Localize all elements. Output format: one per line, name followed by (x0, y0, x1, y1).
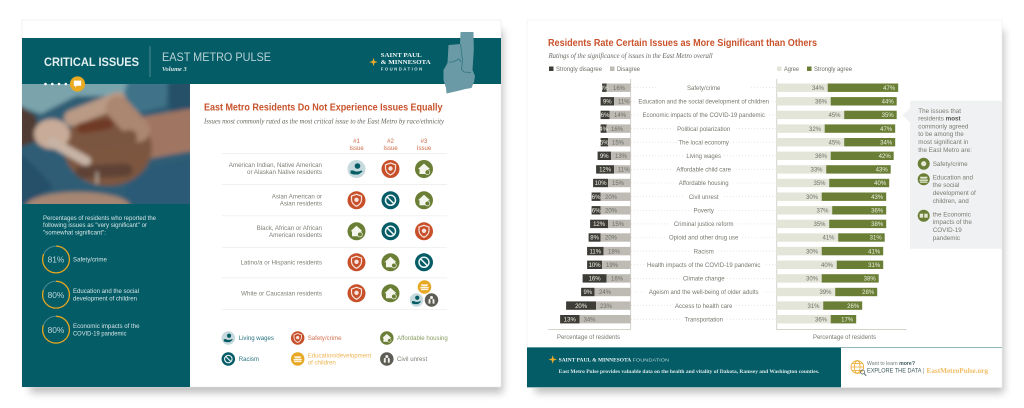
column headers: #1 (353, 139, 360, 145)
row: transportation: 34% (584, 317, 596, 323)
legend: disagree: Strongly disagree (556, 67, 603, 73)
shadow: left slide (30, 30, 503, 393)
callout: most significant issues: development of (933, 190, 976, 197)
row: health impacts: 31% (868, 263, 881, 269)
callout: most significant issues: pandemic (933, 235, 960, 242)
row: access to health care: 20% (575, 304, 588, 310)
row: criminal justice reform: 12% (593, 222, 606, 228)
row: political polarization: 32% (809, 127, 822, 133)
row: opioid: 31% (870, 236, 882, 242)
row: criminal justice reform: 38% (871, 222, 884, 228)
callout: most significant issues: to be among the (918, 131, 964, 138)
footer: explore the data: | (923, 369, 925, 375)
row: access to health care: 26% (847, 304, 860, 310)
row: White: White or Caucasian residents (241, 291, 322, 298)
row: affordable child care: Affordable child care (676, 168, 732, 174)
row: poverty: 37% (816, 209, 829, 215)
row: local economy (600, 137, 895, 147)
row: racism: Racism (694, 249, 714, 255)
row: civil unrest: 30% (806, 195, 819, 201)
row: health impacts: 19% (606, 263, 619, 269)
row: affordable housing: Affordable housing (679, 181, 729, 187)
row: racism: 30% (806, 249, 819, 255)
subtitle: ratings: Ratings of the significance of issues in the East Metro overall (548, 52, 713, 60)
panel: right slide (527, 20, 1002, 388)
diverging bar chart (548, 79, 907, 330)
photo: holding hands (22, 84, 190, 204)
footer: explore the data (851, 361, 989, 376)
row: Black: American residents (269, 232, 322, 239)
stat: 80 percent economic impacts: COVID-19 pandemic (73, 330, 126, 337)
row: affordable housing (593, 178, 889, 188)
row: living wages: Living wages (686, 154, 721, 160)
row: transportation: Transportation (684, 317, 723, 323)
stat: 81 percent safety: Safety/crime (73, 257, 107, 264)
row: local economy: 5% (600, 140, 609, 146)
row: political polarization: 47% (880, 127, 893, 133)
row: opioid: 8% (590, 236, 600, 242)
stat: 81 percent safety: 81% (48, 255, 65, 265)
row: climate change (583, 273, 879, 283)
shadow: right slide (535, 30, 1004, 393)
row: White (241, 280, 438, 307)
row: local economy: 15% (612, 140, 625, 146)
row: access to health care: 31% (807, 304, 820, 310)
row: health impacts: 10% (589, 263, 601, 269)
row: education: 44% (882, 100, 894, 106)
callout: most significant issues: commonly agreed (918, 123, 969, 130)
axis label: right: Percentage of residents (813, 335, 876, 341)
row: climate change: 38% (864, 277, 876, 283)
footer: foundation (527, 347, 1002, 387)
row: poverty: Poverty (694, 209, 714, 215)
row: local economy: 34% (880, 140, 893, 146)
row: Latino (240, 253, 433, 271)
axis label: left: Percentage of residents (557, 335, 620, 341)
row: health impacts (587, 260, 883, 270)
heading: east metro pulse: EAST METRO PULSE (162, 52, 271, 64)
stat: 80 percent economic impacts: 80% (48, 325, 65, 335)
row: safety/crime: 34% (812, 86, 825, 92)
footer: explore the data: Want to learn more? (867, 361, 915, 367)
column headers: #3 (421, 139, 428, 145)
row: racism (587, 246, 883, 256)
row: transportation: 36% (815, 317, 828, 323)
row: affordable child care: 43% (876, 168, 888, 174)
row: access to health care (566, 301, 862, 311)
legend: agree: Strongly agree (814, 67, 853, 73)
row: local economy: The local economy (679, 140, 729, 146)
row: economic impacts: 6% (601, 113, 610, 119)
row: political polarization (599, 124, 895, 134)
callout: most significant issues: the East Metro are: (918, 147, 972, 154)
row: ageism: 9% (583, 290, 593, 296)
column headers: #2 (387, 139, 394, 145)
intro text: "somewhat significant": (43, 229, 106, 236)
row: affordable housing: 10% (595, 181, 607, 187)
header band (22, 38, 501, 84)
row: criminal justice reform: 35% (813, 222, 826, 228)
row: poverty: 36% (871, 209, 884, 215)
row: civil unrest: 20% (605, 195, 618, 201)
stat: 80 percent education: Education and the social (73, 288, 139, 295)
row: opioid: 41% (822, 236, 835, 242)
row: economic impacts: 35% (882, 113, 894, 119)
column headers: Issue (417, 146, 432, 152)
row: political polarization: 16% (611, 127, 624, 133)
row: affordable child care: 33% (810, 168, 823, 174)
table: issues by race (222, 153, 447, 309)
row: poverty: 6% (592, 209, 601, 215)
legend: issue icons: Racism (239, 356, 259, 363)
callout: most significant issues: residents most (918, 116, 962, 123)
row: economic impacts: 45% (828, 113, 841, 119)
row: American Indian: or Alaskan Native residents (247, 169, 322, 176)
row: climate change: 30% (806, 277, 819, 283)
row: affordable child care (596, 164, 891, 174)
row: education (601, 96, 897, 106)
logo: foundation: FOUNDATION (381, 66, 422, 71)
legend: agree (777, 66, 853, 73)
column headers: Issue (349, 146, 364, 152)
callout: most significant issues: the Economic (933, 211, 971, 218)
stat: 80 percent education (43, 281, 139, 308)
heading: issues equally: East Metro Residents Do Not Experience Issues Equally (204, 102, 443, 113)
row: health impacts: Health impacts of the COVID-19 pandemic (647, 263, 760, 269)
legend: disagree: Disagree (617, 67, 641, 73)
row: affordable child care: 11% (618, 168, 630, 174)
icon: economic impacts (918, 210, 930, 222)
row: Black: Black, African or African (257, 225, 323, 232)
row: climate change: 16% (589, 277, 601, 283)
row: local economy: 45% (828, 140, 841, 146)
stat: 80 percent education: 80% (48, 290, 65, 300)
stat: 80 percent education: development of children (73, 295, 137, 302)
footer: foundation: East Metro Pulse provides valuable data on the health and vitality of Dakota, Ramsey and Washington counties. (559, 369, 820, 375)
row: civil unrest: Civil unrest (689, 195, 719, 201)
row: safety/crime (600, 83, 898, 93)
row: ageism: 24% (599, 290, 612, 296)
row: safety/crime: Safety/crime (687, 86, 721, 92)
legend: issue icons: Affordable housing (397, 335, 448, 342)
intro text: following issues as "very significant" or (43, 222, 147, 229)
column headers: Issue (383, 146, 398, 152)
heading: critical issues: CRITICAL ISSUES (44, 56, 139, 69)
row: civil unrest (592, 192, 886, 202)
row: Asian American: Asian American or (272, 194, 322, 200)
row: ageism: Ageism and the well-being of older adults (649, 290, 759, 296)
row: access to health care: Access to health care (675, 304, 733, 310)
row: transportation: 17% (841, 317, 854, 323)
icon: globe with magnifier (851, 361, 866, 376)
callout: most significant issues: Safety/crime (933, 161, 968, 168)
callout: most significant issues: impacts of the (933, 219, 972, 226)
row: safety/crime: 16% (613, 86, 626, 92)
callout: most significant issues: The issues that (918, 108, 961, 115)
callout: most significant issues: most significant in (918, 139, 969, 146)
icon: safety (918, 158, 930, 170)
legend: issue icons: of children (308, 360, 336, 367)
row: opioid: Opioid and other drug use (669, 236, 739, 242)
row: political polarization: 4% (599, 127, 609, 133)
legend: issue icons (222, 331, 448, 367)
stat: 80 percent economic impacts: Economic impacts of the (73, 323, 140, 330)
intro text (43, 215, 157, 236)
row: poverty: 20% (605, 209, 618, 215)
row: ageism (581, 287, 877, 297)
row: living wages: 9% (600, 154, 609, 160)
row: criminal justice reform: Criminal justice reform (674, 222, 734, 228)
row: Latino: Latino/a or Hispanic residents (240, 259, 322, 266)
callout: most significant issues: COVID-19 (933, 227, 962, 234)
row: Black (257, 222, 433, 240)
row: health impacts: 40% (821, 263, 834, 269)
row: racism: 11% (590, 249, 602, 255)
row: climate change: 16% (611, 277, 624, 283)
row: affordable housing: 40% (874, 181, 887, 187)
row: education: 9% (603, 100, 612, 106)
panel: resident percentages (22, 204, 190, 387)
callout: most significant issues (902, 101, 1002, 249)
row: Asian American (272, 191, 433, 209)
row: opioid (589, 232, 885, 242)
logo: foundation: SAINT PAUL (381, 52, 422, 59)
panel: left slide (16, 20, 501, 387)
row: education: Education and the social development of children (638, 100, 769, 106)
heading: residents rate: Residents Rate Certain Issues as More Significant than Others (548, 38, 817, 49)
row: civil unrest: 43% (871, 195, 884, 201)
column headers (349, 139, 432, 152)
row: living wages (598, 151, 894, 161)
intro text: Percentages of residents who reported the (43, 215, 157, 222)
footer: explore the data: EastMetroPulse.org (926, 367, 989, 375)
legend: disagree (549, 66, 641, 73)
legend: issue icons: Living wages (239, 335, 274, 342)
row: living wages: 36% (815, 154, 828, 160)
volume label: Volume 3 (162, 66, 187, 73)
row: political polarization: Political polarization (677, 127, 730, 133)
row: criminal justice reform: 15% (612, 222, 625, 228)
logo: foundation (369, 52, 431, 71)
row: living wages: 13% (615, 154, 628, 160)
row: opioid: 20% (605, 236, 618, 242)
progress dots and speech icon (44, 76, 85, 92)
row: American Indian: American Indian, Native American (229, 162, 323, 169)
row: affordable child care: 12% (599, 168, 612, 174)
callout: most significant issues: Education and (933, 174, 973, 181)
row: access to health care: 23% (600, 304, 613, 310)
footer: foundation: SAINT PAUL & MINNESOTA (559, 357, 631, 363)
row: Asian American: Asian residents (280, 201, 322, 208)
logo: foundation: & MINNESOTA (381, 59, 431, 66)
row: climate change: Climate change (683, 277, 725, 283)
legend: agree: Agree (784, 67, 800, 73)
row: racism: 41% (868, 249, 881, 255)
row: transportation: 13% (564, 317, 576, 323)
row: ageism: 28% (862, 290, 875, 296)
row: American Indian (229, 160, 433, 178)
row: ageism: 39% (819, 290, 832, 296)
footer: foundation: FOUNDATION (632, 357, 670, 363)
legend: issue icons: Civil unrest (397, 356, 427, 363)
row: affordable housing: 35% (813, 181, 826, 187)
callout: most significant issues: children, and (933, 198, 969, 205)
legend: issue icons: Safety/crime (308, 335, 342, 342)
stat: 80 percent economic impacts (43, 316, 140, 343)
row: affordable housing: 15% (612, 181, 625, 187)
row: living wages: 42% (879, 154, 891, 160)
row: economic impacts: Economic impacts of the COVID-19 pandemic (643, 113, 765, 119)
map of east metro counties (444, 32, 475, 94)
footer: explore the data: EXPLORE THE DATA (867, 369, 922, 375)
row: poverty (592, 205, 886, 215)
row: criminal justice reform (590, 219, 886, 229)
row: economic impacts (601, 110, 897, 120)
row: safety/crime: 3% (600, 86, 609, 92)
icon: education (918, 173, 930, 185)
subtitle: issues by race: Issues most commonly rated as the most critical issue to the East Metro by race/ethnicity (203, 118, 445, 126)
legend: issue icons: Education/development (308, 353, 371, 360)
stat: 81 percent safety (43, 246, 107, 273)
row: transportation (560, 314, 856, 324)
row: education: 36% (815, 100, 828, 106)
row: education: 11% (618, 100, 630, 106)
row: safety/crime: 47% (883, 86, 896, 92)
callout: most significant issues: the social (933, 182, 959, 189)
row: economic impacts: 14% (614, 113, 627, 119)
row: civil unrest: 6% (592, 195, 601, 201)
row: racism: 18% (608, 249, 621, 255)
